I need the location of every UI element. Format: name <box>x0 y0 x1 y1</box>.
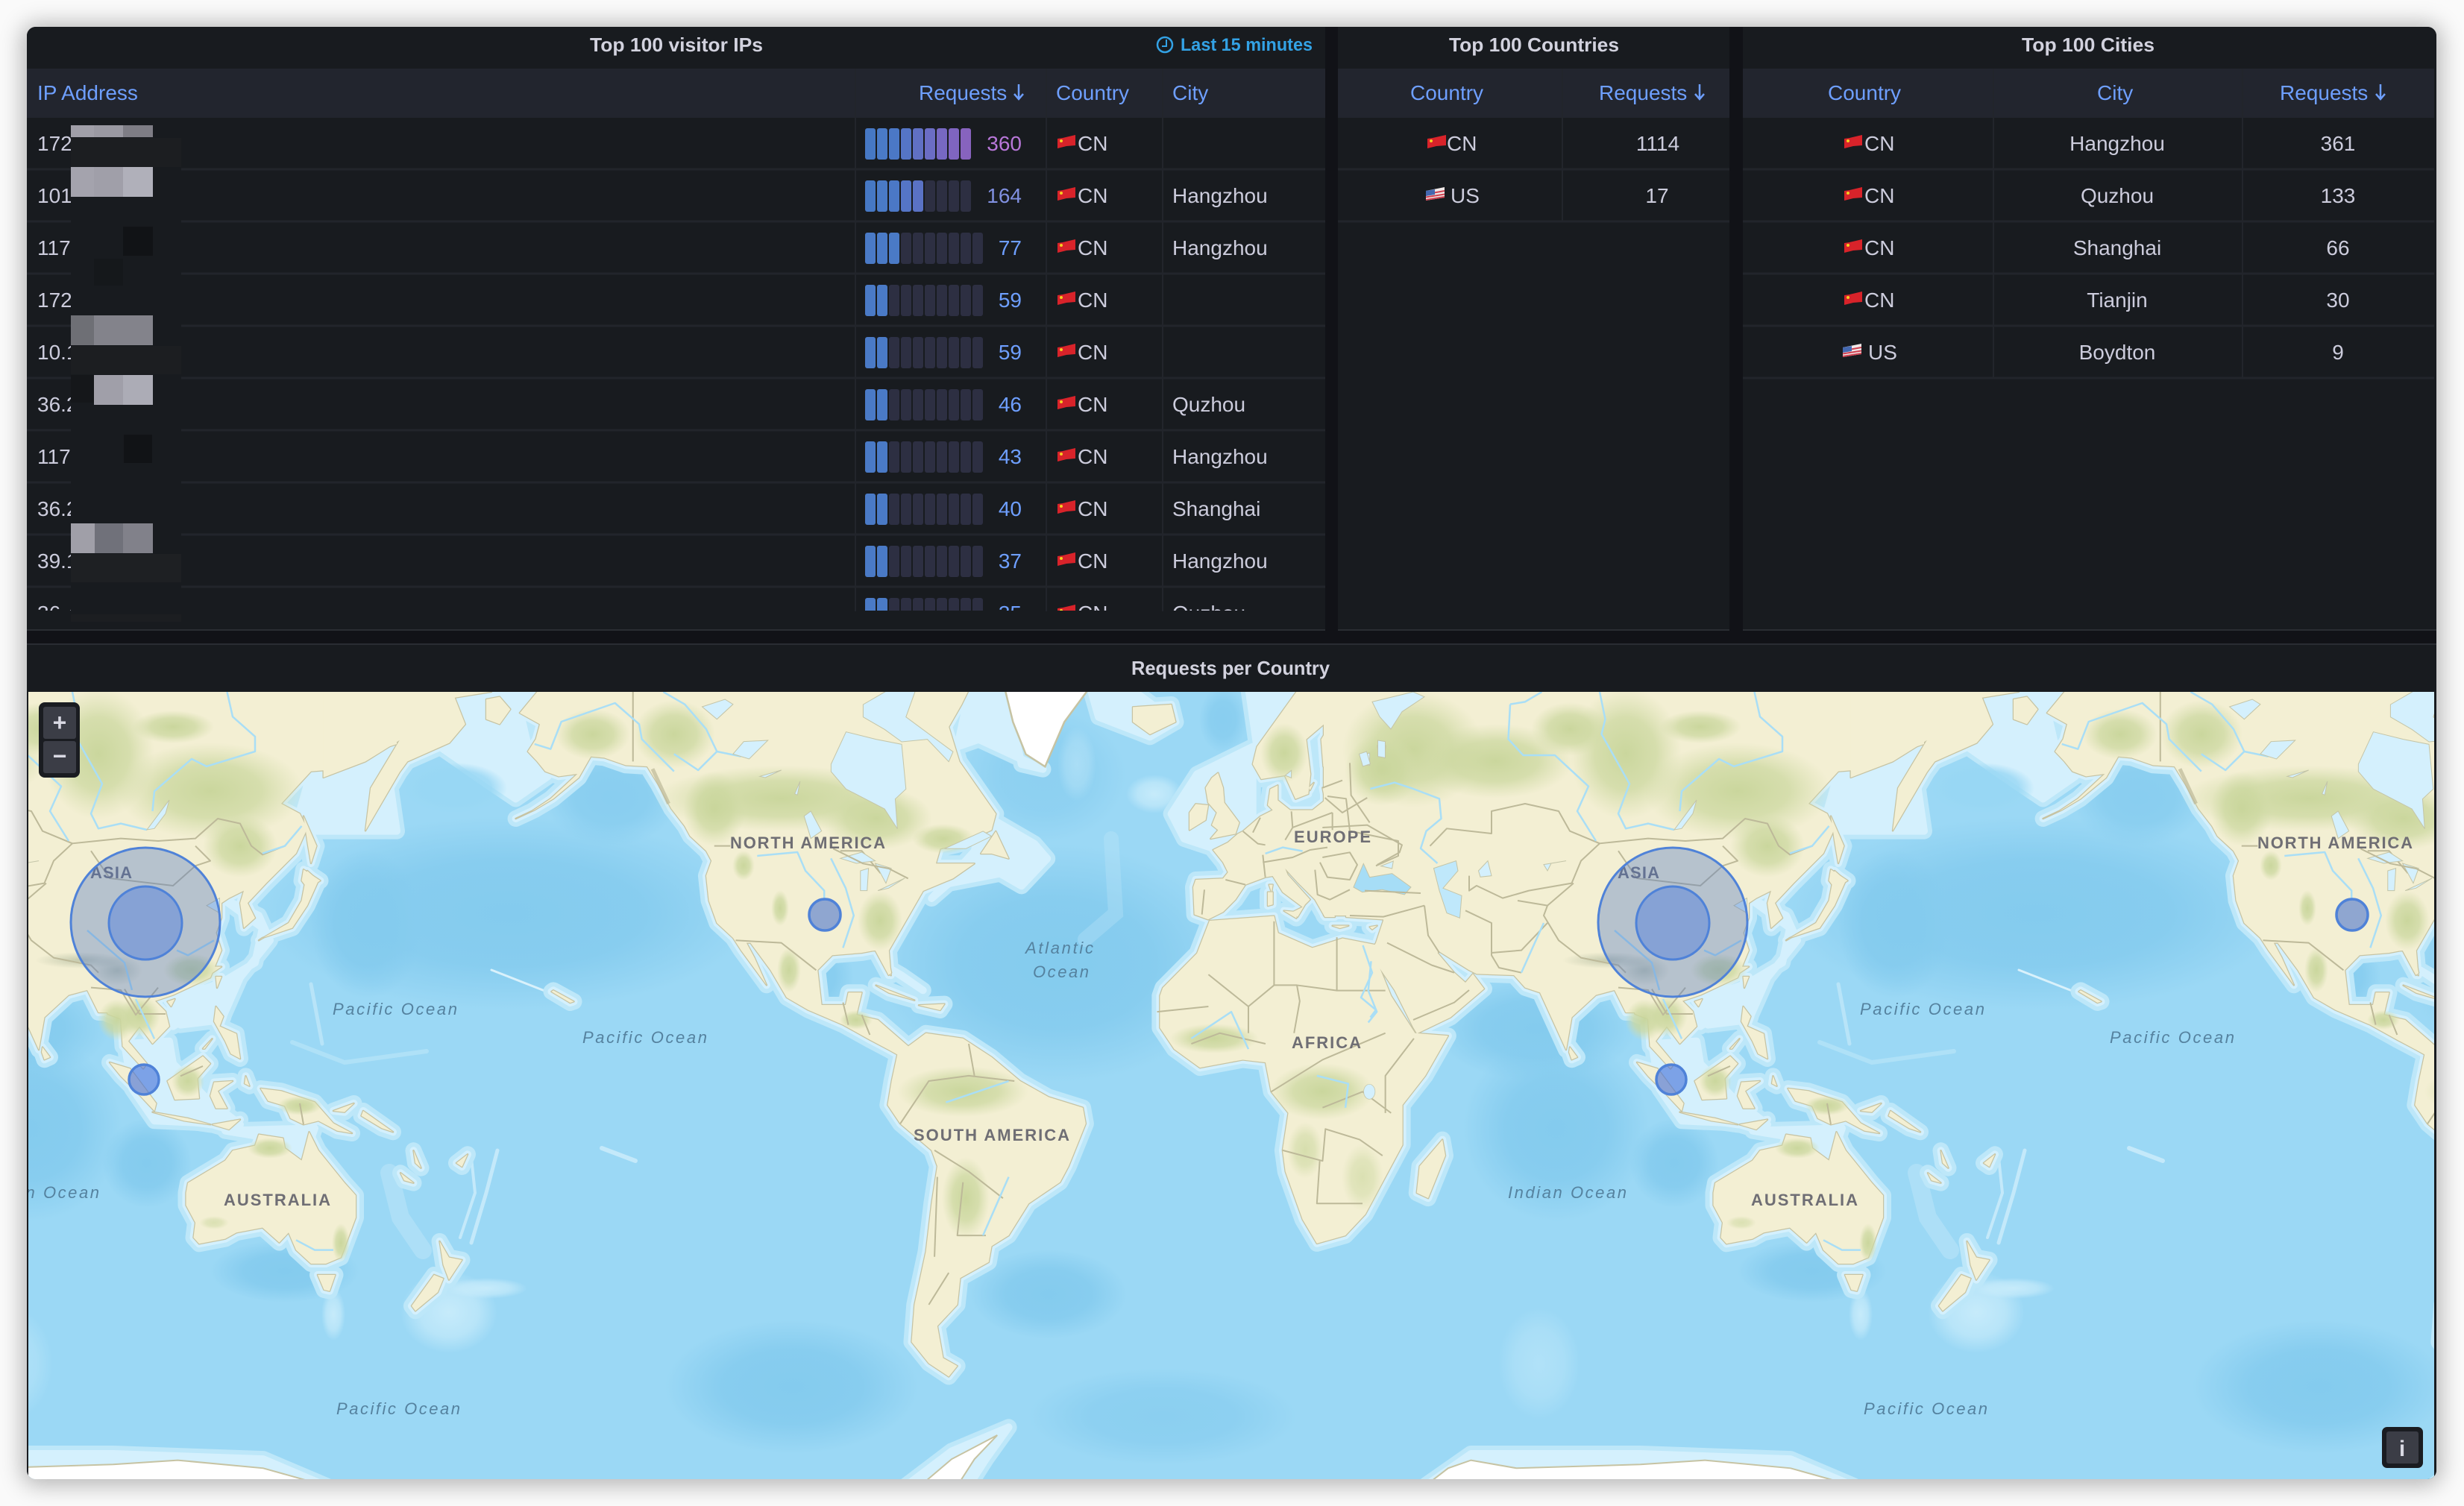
table header: countries <box>1411 84 1705 104</box>
row 4: CN <box>1078 289 1107 312</box>
time range note: Last 15 minutes <box>1181 35 1313 55</box>
row 8: 40 <box>999 497 1022 520</box>
row 7: 43 <box>999 445 1022 468</box>
map labels: NORTH AMERICA <box>730 834 885 852</box>
row: Shanghai: CN <box>1864 236 1894 259</box>
map labels: ASIA <box>1618 863 1659 882</box>
row 5: CN <box>1078 341 1107 364</box>
map labels: Pacific Ocean <box>333 1000 457 1018</box>
row 10, clipped: CN <box>1078 602 1107 625</box>
row 9: 39.1 <box>37 549 78 573</box>
row: Boydton: 9 <box>2332 341 2344 364</box>
map labels: Pacific Ocean <box>1860 1000 1984 1018</box>
data circles: United States <box>809 899 2368 930</box>
map labels: ASIA <box>90 863 132 882</box>
panel: top 100 countries <box>1338 27 1729 630</box>
table header: IP panel: City <box>1172 81 1208 104</box>
row 3: 77 <box>999 236 1022 259</box>
row 9: Hangzhou <box>1172 549 1268 573</box>
row: Boydton: Boydton <box>2079 341 2155 364</box>
row: Quzhou: Quzhou <box>2081 184 2154 207</box>
map labels: SOUTH AMERICA <box>914 1126 1069 1144</box>
row: Shanghai: Shanghai <box>2073 236 2161 259</box>
table header: IP panel: Requests <box>919 81 1007 104</box>
row 6 <box>37 389 1245 420</box>
row 10, clipped: 35 <box>999 602 1022 625</box>
row: Tianjin: CN <box>1864 289 1894 312</box>
info button: i <box>2399 1437 2405 1461</box>
table rows: IP panel <box>37 128 1268 629</box>
row: Tianjin <box>1844 289 2350 312</box>
panel: top 100 visitor IPs <box>27 27 1325 630</box>
row 10, clipped: Quzhou <box>1172 602 1245 625</box>
row 4: 59 <box>999 289 1022 312</box>
heading: top 100 cities: Top 100 Cities <box>2022 34 2155 56</box>
row 6: 46 <box>999 393 1022 416</box>
row 9: CN <box>1078 549 1107 573</box>
row 8: CN <box>1078 497 1107 520</box>
table header: IP panel: Country <box>1056 81 1129 104</box>
data circles: China, left copy <box>71 848 220 997</box>
data circles: Singapore <box>129 1065 1686 1094</box>
table header: IP panel: IP Address <box>37 81 138 104</box>
row 5: 10.1 <box>37 341 78 364</box>
map labels: Atlantic <box>1024 939 1093 957</box>
table header: cities: Requests <box>2280 81 2368 104</box>
table header: countries: Requests <box>1599 81 1687 104</box>
row 4 <box>37 285 1107 316</box>
row 2: CN <box>1078 184 1107 207</box>
row 1 <box>37 128 1107 160</box>
zoom control <box>39 702 80 778</box>
row 10, clipped <box>38 598 1244 611</box>
map labels <box>0 828 2413 1418</box>
row 7: Hangzhou <box>1172 445 1268 468</box>
row 3: Hangzhou <box>1172 236 1268 259</box>
row: Hangzhou: CN <box>1864 132 1894 155</box>
row 7: 117 <box>37 445 71 468</box>
map labels: Indian Ocean <box>1508 1183 1627 1202</box>
heading: top 100 visitor IPs: Top 100 visitor IPs <box>590 34 763 56</box>
row 8: Shanghai <box>1172 497 1260 520</box>
redaction blocks over IP addresses <box>71 122 181 622</box>
row 9 <box>37 546 1268 577</box>
row: Quzhou <box>1844 184 2355 207</box>
panel: requests per country <box>0 643 2464 1486</box>
table header: cities: Country <box>1828 81 1901 104</box>
heading: top 100 countries: Top 100 Countries <box>1449 34 1619 56</box>
row: Tianjin: Tianjin <box>2087 289 2148 312</box>
row 6: Quzhou <box>1172 393 1245 416</box>
table header: IP panel <box>39 84 1208 104</box>
row 3: 117 <box>37 236 71 259</box>
map labels: Pacific Ocean <box>2110 1028 2234 1047</box>
row 3: CN <box>1078 236 1107 259</box>
data circles: China, right copy <box>1598 848 1747 997</box>
row: CN 1114: 1114 <box>1636 132 1679 155</box>
zoom control: − <box>53 743 66 769</box>
map labels: AFRICA <box>1292 1033 1361 1052</box>
row: US 17: US <box>1451 184 1480 207</box>
row 1: CN <box>1078 132 1107 155</box>
row 7: CN <box>1078 445 1107 468</box>
row: Quzhou: CN <box>1864 184 1894 207</box>
map labels: Pacific Ocean <box>582 1028 707 1047</box>
row: Shanghai: 66 <box>2326 236 2350 259</box>
row: Quzhou: 133 <box>2321 184 2355 207</box>
heading: requests per country: Requests per Country <box>1131 657 1330 679</box>
row 2: 164 <box>987 184 1022 207</box>
map labels: Pacific Ocean <box>336 1399 460 1418</box>
row 9: 37 <box>999 549 1022 573</box>
info button <box>2382 1427 2423 1468</box>
map labels: AUSTRALIA <box>224 1191 330 1209</box>
row: Tianjin: 30 <box>2326 289 2350 312</box>
world map <box>0 681 2464 1486</box>
table header: cities: City <box>2097 81 2133 104</box>
row 8 <box>37 494 1260 525</box>
row: Hangzhou <box>1844 132 2355 155</box>
table header: countries: Country <box>1410 81 1483 104</box>
row: Boydton <box>1843 341 2344 364</box>
row: Boydton: US <box>1868 341 1897 364</box>
row 10, clipped: 36.4 <box>37 602 78 625</box>
row 2: 101 <box>37 184 72 207</box>
row 2 <box>37 180 1268 212</box>
map labels: EUROPE <box>1294 828 1371 846</box>
row 4: 172 <box>37 289 72 312</box>
row 1: 172 <box>37 132 72 155</box>
map labels: NORTH AMERICA <box>2257 834 2413 852</box>
row 5: 59 <box>999 341 1022 364</box>
row 7 <box>37 441 1268 473</box>
row: Hangzhou: Hangzhou <box>2069 132 2165 155</box>
row 6: 36.2 <box>37 393 78 416</box>
row 6: CN <box>1078 393 1107 416</box>
row: CN 1114: CN <box>1447 132 1477 155</box>
row: CN 1114 <box>1427 135 1679 151</box>
row 1: 360 <box>987 132 1022 155</box>
map labels: AUSTRALIA <box>1751 1191 1858 1209</box>
row: US 17: 17 <box>1645 184 1669 207</box>
map labels: Ocean <box>1033 962 1089 981</box>
panel: top 100 cities <box>1743 27 2436 630</box>
zoom control: + <box>53 709 66 736</box>
row 2: Hangzhou <box>1172 184 1268 207</box>
row: US 17 <box>1426 187 1668 203</box>
row 5 <box>37 337 1107 368</box>
table header: cities <box>1828 81 2385 104</box>
row: Shanghai <box>1844 236 2350 259</box>
row: Hangzhou: 361 <box>2321 132 2355 155</box>
map labels: Pacific Ocean <box>1864 1399 1987 1418</box>
row 8: 36.2 <box>37 497 78 520</box>
row 3 <box>37 233 1268 264</box>
